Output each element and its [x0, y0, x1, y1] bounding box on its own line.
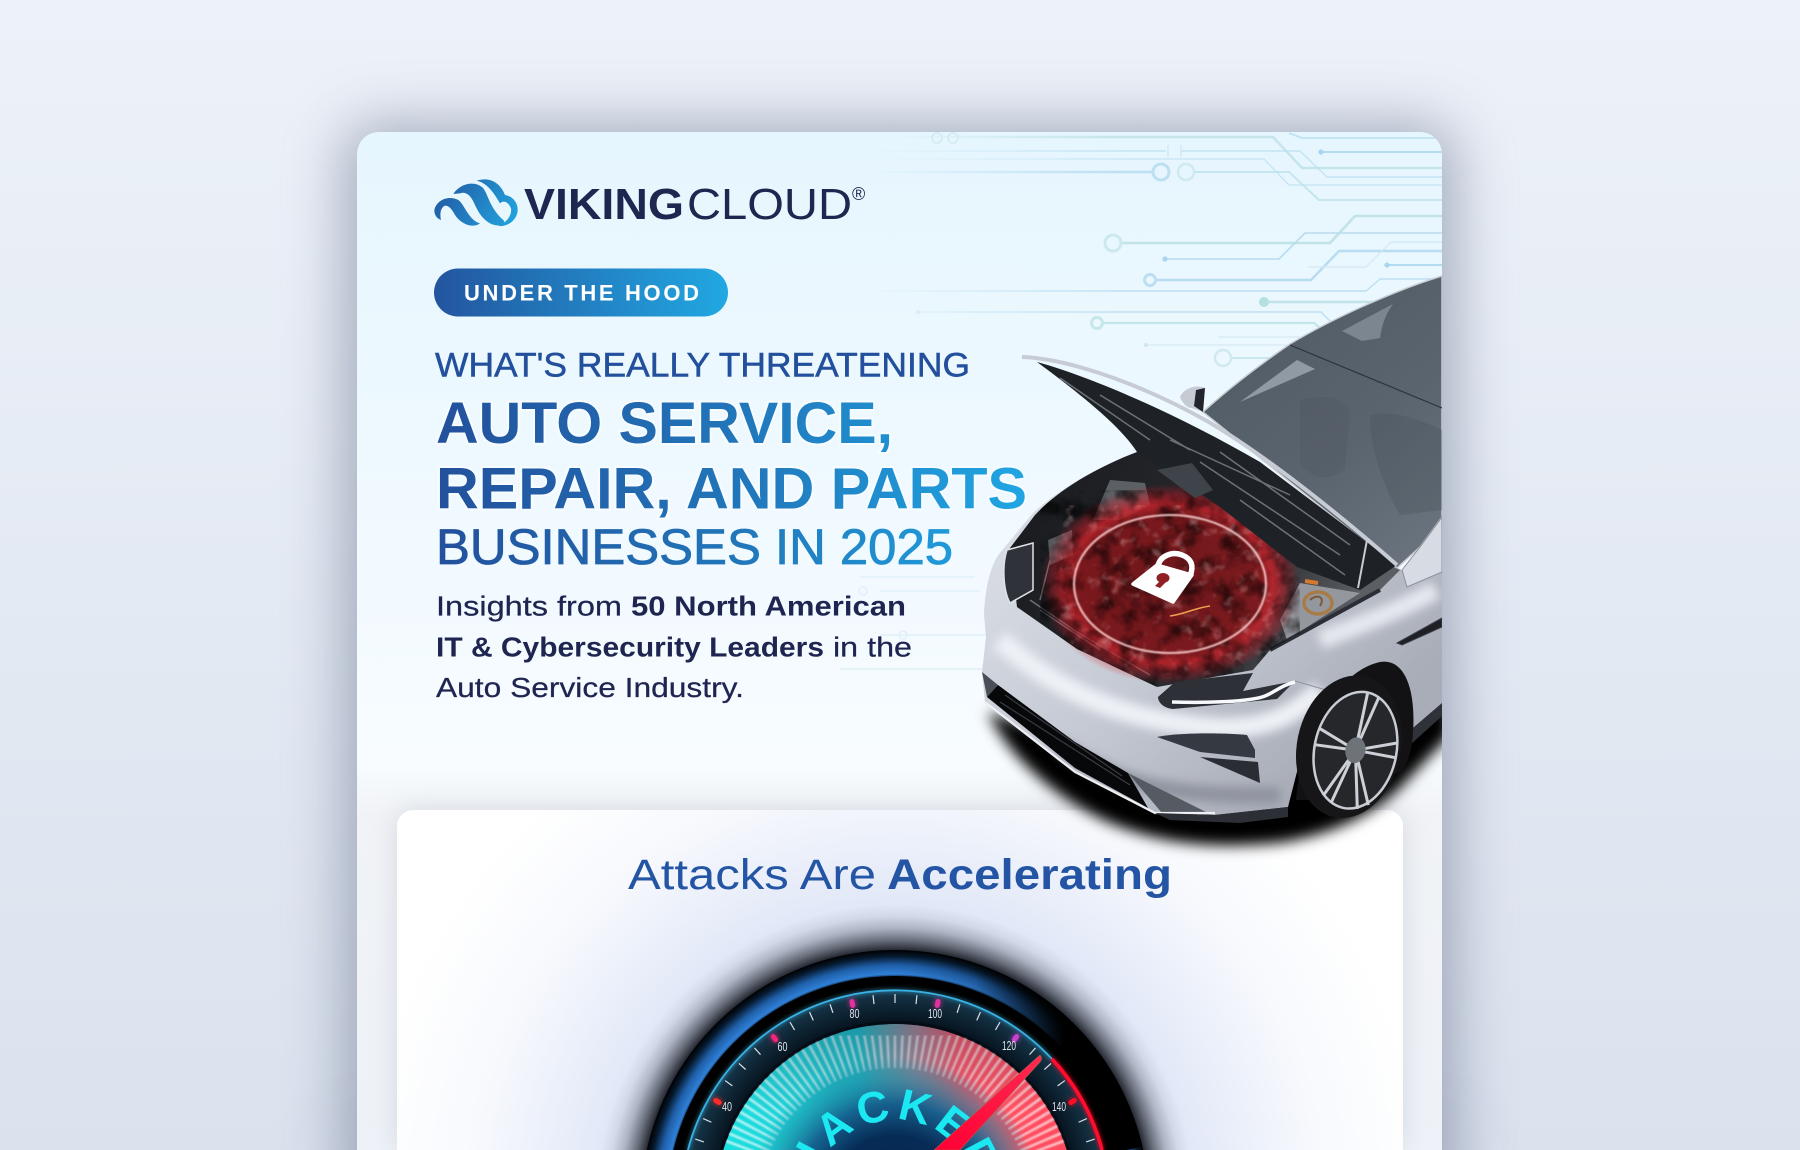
side sill: [1407, 703, 1442, 745]
title: AUTO SERVICE,: [436, 391, 893, 456]
car hood open: [1022, 357, 1397, 590]
lock ring: [1074, 515, 1266, 653]
body highlights: [1000, 590, 1436, 795]
logo: ®: [852, 184, 865, 204]
speedometer gauge: [608, 911, 1182, 1150]
red lock glow: [1040, 484, 1300, 684]
engine texture: [1040, 490, 1300, 690]
section heading: Accelerating: [887, 851, 1172, 899]
subtitle text: [436, 590, 912, 703]
subtitle text: in the: [833, 632, 912, 662]
gauge dial stripes: [746, 1046, 1044, 1150]
car body: [982, 452, 1442, 815]
gauge scale numbers: 120: [1002, 1039, 1016, 1053]
logo: CLOUD: [687, 180, 852, 229]
logo cloud icon: [434, 179, 518, 226]
title: BUSINESSES IN 2025: [436, 519, 953, 575]
circuit board pattern: [840, 133, 1442, 669]
gauge scale numbers: 80: [850, 1007, 860, 1021]
padlock icon: [1133, 554, 1192, 602]
logo: [434, 179, 865, 229]
gauge red zone: [1052, 1059, 1102, 1150]
gauge dial: [720, 1021, 1070, 1150]
car engine bay: [1010, 452, 1400, 687]
fog lamp: [1157, 733, 1255, 758]
gauge major markers: [716, 1002, 1074, 1102]
badge: UNDER THE HOOD: [464, 280, 699, 306]
hood strut: [1358, 540, 1367, 588]
subtitle text: IT & Cybersecurity Leaders: [436, 632, 824, 662]
subtitle text: Insights from: [436, 590, 622, 622]
engine oil cap: [1304, 592, 1332, 614]
title: [435, 346, 1027, 575]
section heading: [628, 851, 1172, 899]
lower bumper insert: [1128, 773, 1208, 813]
results panel: [397, 810, 1403, 1150]
car shadow: [988, 700, 1450, 845]
bay right edge: [1270, 590, 1380, 650]
gauge scale numbers: 140: [1052, 1100, 1066, 1114]
side intake: [1200, 757, 1260, 783]
side vent: [1397, 618, 1442, 645]
section heading: Attacks Are: [628, 851, 876, 899]
car windshield and roof: [1203, 276, 1442, 568]
gauge tick band: [688, 990, 1102, 1150]
gauge scale numbers: 40: [722, 1100, 732, 1114]
title: WHAT'S REALLY THREATENING: [435, 346, 970, 384]
main headlight: [1158, 673, 1295, 709]
gauge scale numbers: [722, 1007, 1066, 1114]
subtitle text: Auto Service Industry.: [436, 672, 744, 703]
badge: [434, 268, 728, 316]
car mirror: [1180, 386, 1205, 412]
gauge inner black ring: [674, 976, 1054, 1150]
pillar silver panel: [1402, 517, 1442, 587]
wheel arch: [1296, 662, 1413, 800]
engine details: [1030, 480, 1360, 675]
gauge outer ring: [647, 950, 1143, 1150]
card drop shadow: [345, 125, 1454, 1150]
main card: [357, 132, 1442, 1150]
gauge scale numbers: 100: [928, 1007, 942, 1021]
left headlight housing: [1004, 543, 1033, 603]
logo wordmark: VIKING: [524, 180, 684, 229]
gauge needle: [934, 1055, 1042, 1150]
title: REPAIR, AND PARTS: [436, 456, 1027, 522]
subtitle text: 50 North American: [631, 590, 906, 622]
car: [982, 276, 1450, 845]
gauge shadow: [600, 905, 1190, 1150]
front wheel: [1283, 666, 1415, 828]
gauge scale numbers: 60: [778, 1040, 788, 1054]
gauge ticks: [686, 994, 1104, 1150]
front grille: [982, 672, 1288, 823]
